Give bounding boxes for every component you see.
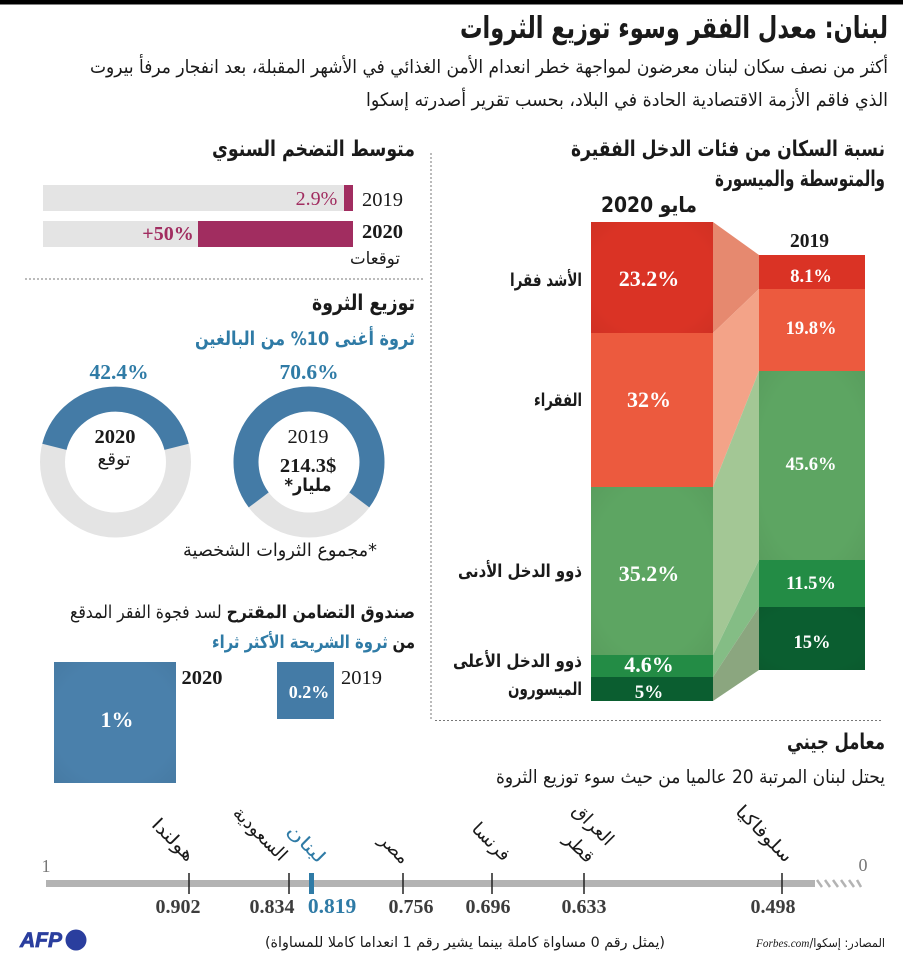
country labels: العراق (568, 800, 618, 850)
country labels: هولندا (147, 814, 199, 866)
country labels: قطر (559, 828, 598, 868)
category labels: الفقراء (534, 390, 582, 411)
bar: 2020 inflation: +50% (142, 223, 194, 245)
bar: 2019 inflation: 2.9% (296, 188, 337, 210)
logo: AFP: AFP (19, 929, 63, 952)
heading: income groups (571, 137, 885, 192)
stacked column: 2019: 45.6% (786, 455, 836, 475)
country labels: مصر (374, 829, 413, 869)
donut: 2019: مليار* (284, 475, 332, 496)
axis values: 0.696 (466, 896, 510, 918)
stacked column: 2019: 15% (794, 633, 830, 653)
square: 2020 1%: 2020 (182, 667, 222, 689)
heading: inflation: متوسط التضخم السنوي (212, 137, 415, 162)
country labels: سلوفاكيا (731, 801, 797, 867)
subheading: richest 10%: ثروة أغنى 10% من البالغين (195, 326, 415, 350)
panel: wealth distribution (52, 291, 415, 561)
heading: wealth distribution: توزيع الثروة (312, 291, 415, 316)
stacked column: May 2020: 32% (627, 387, 671, 412)
stacked column: May 2020 (591, 222, 713, 703)
label: forecast: توقعات (350, 249, 400, 269)
panel: solidarity fund (54, 602, 415, 783)
stacked column: May 2020: 23.2% (619, 266, 679, 291)
axis values: 0.498 (750, 896, 796, 918)
scale axis: 0 (858, 855, 868, 875)
axis values: 0.819 (308, 894, 356, 918)
note: scale explanation: (يمثل رقم 0 مساواة كاملة بينما يشير رقم 1 انعداما كاملا للمساواة) (265, 935, 665, 951)
stacked column: 2019: 8.1% (790, 267, 832, 287)
bar: 2020 inflation (43, 221, 403, 269)
panel: Gini coefficient (42, 730, 885, 918)
category labels: الأشد فقرا (510, 269, 582, 291)
donut: 2020: 2020 (94, 426, 136, 448)
subtitle text: الذي فاقم الأزمة الاقتصادية الحادة في البلاد، بحسب تقرير أصدرته إسكوا (366, 87, 888, 111)
donut: 2020 (52, 399, 178, 525)
scale axis (42, 855, 868, 894)
square: 2019 0.2%: 0.2% (289, 682, 329, 702)
value: 42.4%: 42.4% (89, 360, 149, 384)
connector bands (713, 222, 759, 701)
value: 70.6%: 70.6% (279, 360, 339, 384)
country labels (147, 800, 797, 869)
heading: solidarity fund: من ثروة الشريحة الأكثر ثراء (212, 631, 415, 653)
donut: 2020: توقع (98, 449, 130, 470)
donut: 2019 (246, 399, 372, 525)
category labels: ذوو الدخل الأعلى (453, 650, 582, 672)
panel: inflation (43, 137, 415, 269)
subtitle text (90, 54, 888, 111)
bar: 2019 inflation: 2019 (362, 189, 403, 211)
country labels: لبنان (282, 820, 330, 868)
square: 2019 0.2% (277, 662, 382, 719)
axis values: 0.756 (388, 896, 434, 918)
stacked column: 2019: 11.5% (786, 574, 836, 594)
square: 2020 1% (54, 662, 222, 783)
category labels: الميسورون (508, 679, 582, 700)
stacked column: 2019: 19.8% (786, 319, 836, 339)
donut: 2019: 2019 (288, 426, 328, 448)
stacked column: 2019 (759, 255, 865, 670)
square: 2019 0.2%: 2019 (341, 667, 382, 689)
axis values: 0.633 (562, 896, 606, 918)
heading: solidarity fund (70, 602, 415, 653)
axis values: 0.834 (250, 896, 294, 918)
logo: AFP (19, 929, 86, 952)
source credit: المصادر: إسكوا/Forbes.com (755, 936, 885, 951)
stacked column: May 2020: 5% (635, 682, 663, 703)
country labels: السعودية (228, 803, 291, 866)
stacked column: May 2020: 35.2% (619, 561, 679, 586)
category labels: ذوو الدخل الأدنى (458, 560, 582, 582)
panel: income groups chart (453, 137, 885, 703)
subheading: Gini rank: يحتل لبنان المرتبة 20 عالميا من حيث سوء توزيع الثروة (496, 767, 885, 788)
country labels: فرنسا (467, 818, 515, 866)
square: 2020 1%: 1% (100, 707, 134, 732)
scale axis: 1 (42, 856, 50, 876)
footnote: total personal wealth: *مجموع الثروات الشخصية (183, 540, 377, 561)
donut: 2019: 214.3$ (280, 455, 336, 477)
bar: 2020 inflation: 2020 (362, 221, 403, 243)
stacked column: May 2020: 4.6% (624, 652, 674, 677)
label: 2019: 2019 (790, 231, 829, 252)
category labels (453, 269, 582, 700)
label: May 2020: مايو 2020 (601, 193, 697, 217)
bar: 2019 inflation (43, 185, 403, 211)
heading: solidarity fund: صندوق التضامن المقترح لسد فجوة الفقر المدقع (70, 602, 415, 623)
axis values (156, 894, 796, 918)
axis values: 0.902 (156, 896, 200, 918)
